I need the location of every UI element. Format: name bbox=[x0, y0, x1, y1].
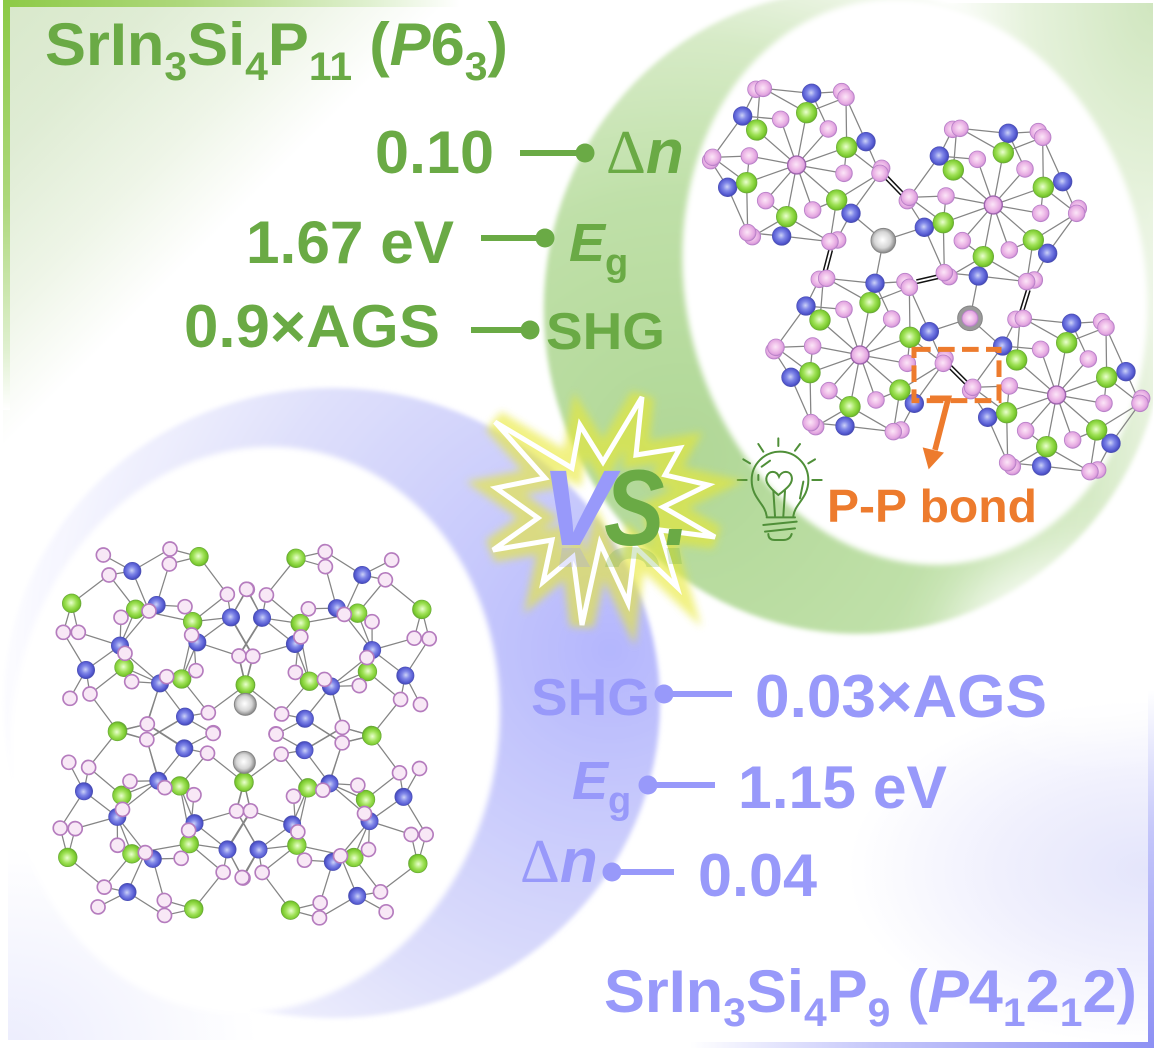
P-P double bonds bbox=[825, 176, 1028, 385]
property row: band gap 1.67 eV: 1.67 eV bbox=[246, 209, 454, 276]
property row: SHG 0.9xAGS: SHG bbox=[546, 303, 665, 361]
title: SrIn3Si4P9: P bbox=[827, 958, 868, 1025]
VS reflection: S. bbox=[604, 524, 690, 644]
title: SrIn3Si4P11: 3 bbox=[164, 45, 187, 89]
property row: SHG 0.03xAGS: SHG bbox=[531, 669, 650, 727]
property row: SHG 0.03xAGS bbox=[531, 663, 1047, 730]
title: SrIn3Si4P11: P6 bbox=[390, 11, 464, 78]
label: P-P bond: P-P bond bbox=[827, 480, 1037, 532]
property row: band gap 1.15 eV: E bbox=[572, 751, 608, 811]
property row: birefringence 0.10: Δn bbox=[606, 118, 684, 187]
grey bonds bbox=[58, 548, 432, 919]
title: SrIn3Si4P11: ( bbox=[352, 11, 390, 78]
arrow to P-P bond label bbox=[923, 398, 948, 469]
title: SrIn3Si4P9: 2) bbox=[1082, 958, 1137, 1025]
title: SrIn3Si4P9: 9 bbox=[868, 991, 890, 1035]
title: SrIn3Si4P9: 2 bbox=[1026, 958, 1060, 1025]
title: SrIn3Si4P9: Si bbox=[746, 958, 804, 1025]
VS reflection bbox=[559, 547, 682, 567]
property row: band gap 1.67 eV bbox=[246, 209, 628, 284]
blue corner frame bbox=[690, 690, 1154, 1048]
title: SrIn3Si4P9: SrIn bbox=[604, 958, 721, 1025]
green crescent bbox=[502, 0, 1158, 720]
atoms bbox=[51, 542, 439, 926]
highlight box: P-P bond bbox=[914, 349, 999, 401]
property row: band gap 1.67 eV: E bbox=[569, 213, 605, 273]
title: SrIn3Si4P11: 3 bbox=[465, 45, 488, 89]
property row: birefringence 0.04: 0.04 bbox=[698, 842, 818, 909]
crystal structure: SrIn3Si4P11 bbox=[702, 80, 1150, 480]
crystal structure: SrIn3Si4P9 bbox=[51, 542, 439, 926]
title: SrIn3Si4P9: 3 bbox=[723, 991, 746, 1035]
title: SrIn3Si4P9: ( bbox=[890, 958, 928, 1025]
icon: light bulb with heart bbox=[738, 438, 822, 540]
grey bonds bbox=[711, 88, 1140, 472]
title: SrIn3Si4P9: 1 bbox=[1060, 991, 1082, 1035]
VS text bbox=[541, 447, 690, 569]
property row: SHG 0.9xAGS: 0.9×AGS bbox=[184, 293, 440, 360]
title: SrIn3Si4P11: P bbox=[268, 11, 309, 78]
green corner frame bbox=[3, 0, 460, 410]
VS burst bbox=[493, 397, 715, 646]
title: SrIn3Si4P9: P4 bbox=[928, 958, 1002, 1025]
title: SrIn3Si4P11: Si bbox=[187, 11, 245, 78]
title: SrIn3Si4P11: 4 bbox=[245, 45, 269, 89]
property row: SHG 0.9xAGS bbox=[184, 293, 665, 361]
property row: SHG 0.03xAGS: 0.03×AGS bbox=[755, 663, 1047, 730]
property row: birefringence 0.10: 0.10 bbox=[375, 119, 494, 186]
VS reflection: V bbox=[541, 525, 621, 646]
property row: band gap 1.15 eV: g bbox=[608, 780, 631, 822]
title: SrIn3Si4P11: SrIn bbox=[45, 11, 162, 78]
VS text: V bbox=[541, 447, 621, 568]
property row: band gap 1.15 eV: 1.15 eV bbox=[738, 754, 947, 821]
property row: birefringence 0.04: Δn bbox=[520, 827, 598, 896]
title: SrIn3Si4P9: 1 bbox=[1003, 991, 1026, 1035]
property row: band gap 1.15 eV bbox=[572, 751, 947, 822]
property row: birefringence 0.04 bbox=[520, 827, 818, 909]
title: SrIn3Si4P9: 4 bbox=[804, 991, 827, 1035]
burst glow bbox=[493, 397, 715, 625]
title: SrIn3Si4P11: 11 bbox=[309, 45, 352, 89]
property row: birefringence 0.10 bbox=[375, 118, 684, 187]
atoms bbox=[702, 80, 1150, 480]
property row: band gap 1.67 eV: g bbox=[605, 242, 628, 284]
blue crescent bbox=[0, 388, 660, 1051]
VS text: S. bbox=[604, 449, 690, 569]
title: SrIn3Si4P11: ) bbox=[488, 11, 508, 78]
burst outline bbox=[493, 397, 715, 625]
